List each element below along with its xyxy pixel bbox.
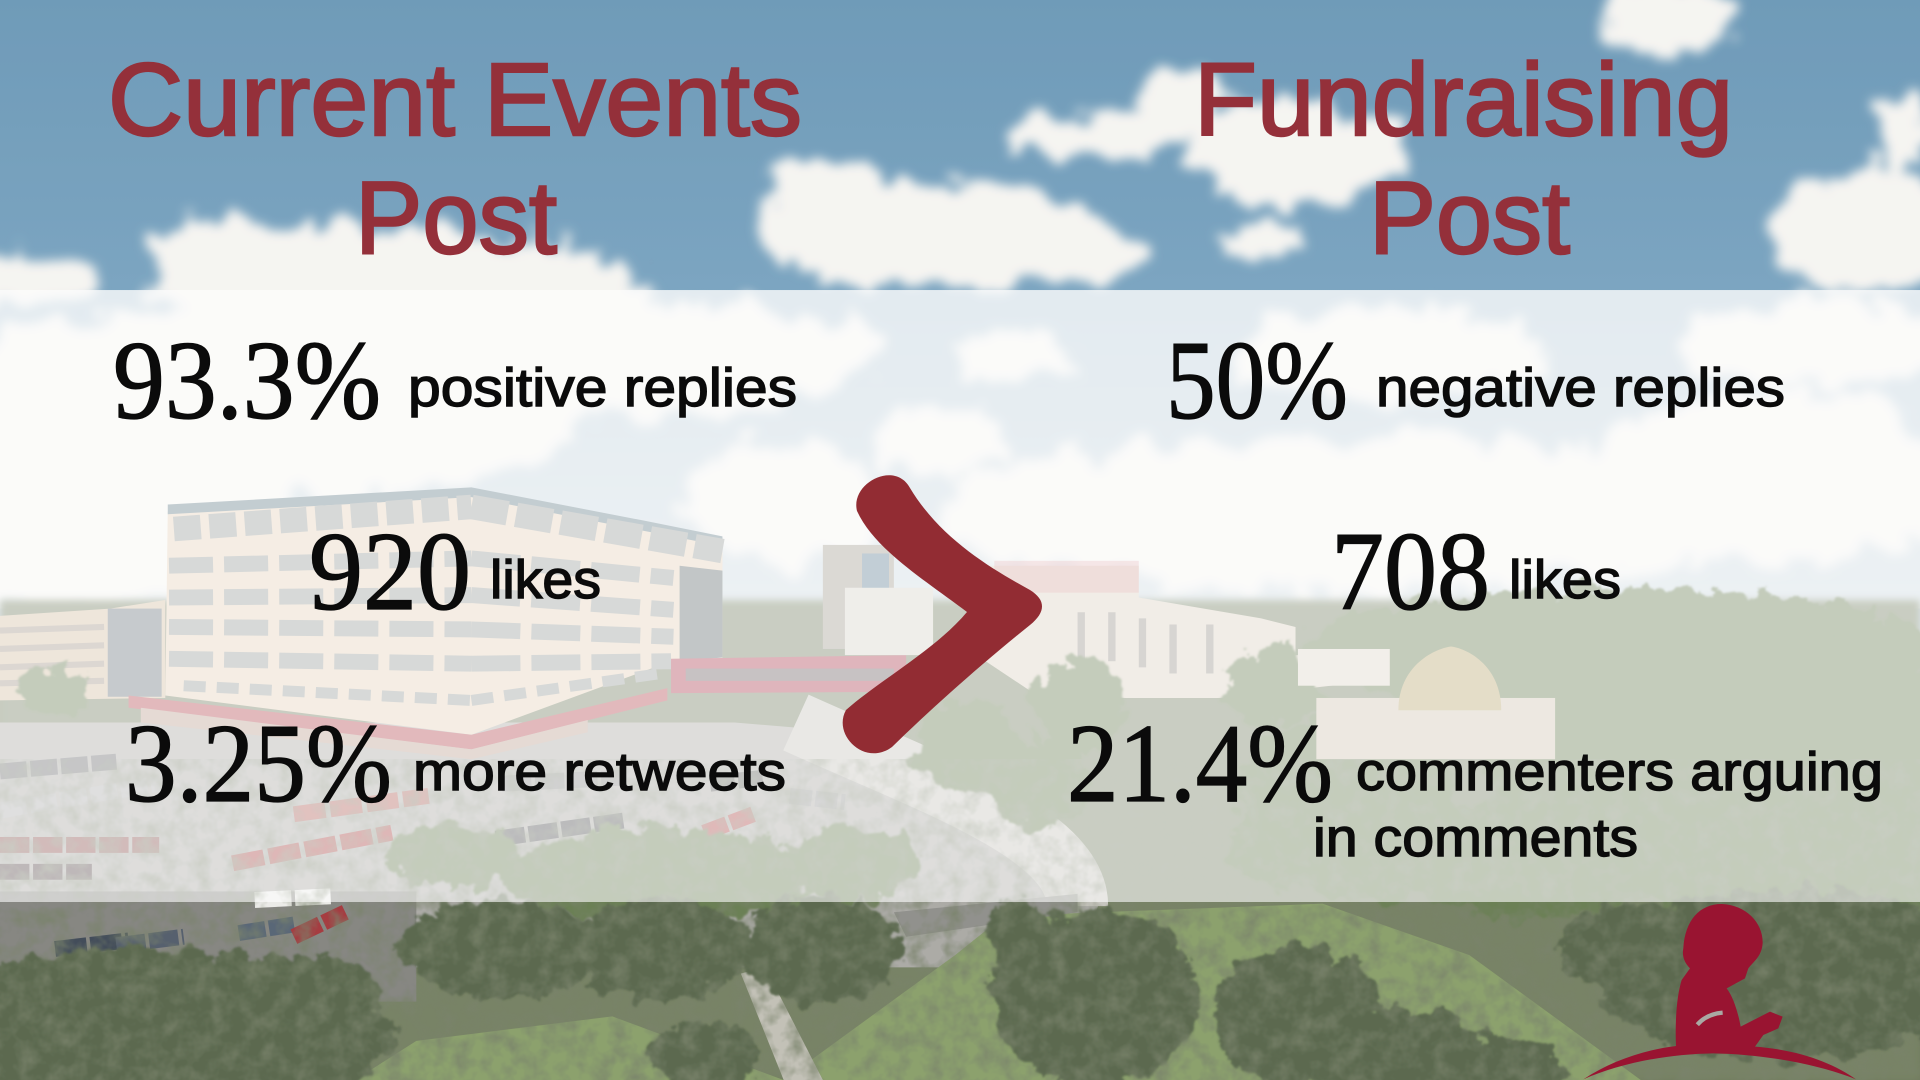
foreground trees <box>0 888 1920 1080</box>
heading: fundraising post: Fundraising <box>1194 42 1733 157</box>
clouds <box>0 0 1920 612</box>
parking lot and road <box>0 722 1102 980</box>
stat: 708 likes: 708 <box>1331 510 1490 634</box>
pale sky wash under band <box>0 290 1920 609</box>
arrow: greater-than chevron <box>843 475 1042 753</box>
stat: 93.3% positive replies: positive replies <box>408 358 797 418</box>
stat: 3.25% more retweets: 3.25% <box>125 702 392 826</box>
tree masses <box>18 588 1920 967</box>
red canopy and bridge <box>129 688 667 749</box>
stat: 708 likes <box>1331 510 1621 634</box>
main building <box>165 490 722 735</box>
stat: 920 likes: 920 <box>309 510 471 634</box>
heading: current events post <box>108 42 802 275</box>
icon: St. Jude child logo <box>1583 904 1856 1079</box>
stat: 50% negative replies <box>1166 319 1785 443</box>
dome building <box>1298 649 1390 686</box>
stat: 3.25% more retweets: more retweets <box>413 742 786 802</box>
left garage <box>0 600 165 700</box>
parked cars <box>0 762 845 949</box>
heading: fundraising post: Post <box>1369 160 1570 275</box>
stat: 21.4% commenters arguing in comments <box>1067 702 1883 868</box>
stat: 93.3% positive replies: 93.3% <box>113 319 381 443</box>
center tower <box>823 545 894 649</box>
stat: 21.4% commenters arguing in comments: 21.4% <box>1067 702 1333 826</box>
right complex <box>986 566 1384 698</box>
panel: translucent white band <box>0 290 1920 902</box>
heading: current events post: Post <box>355 160 557 275</box>
stat: 3.25% more retweets <box>125 702 786 826</box>
stat: 93.3% positive replies <box>113 319 797 443</box>
stat: 708 likes: likes <box>1509 550 1621 610</box>
stat: 21.4% commenters arguing in comments: in comments <box>1313 808 1638 868</box>
stat: 21.4% commenters arguing in comments: commenters arguing <box>1356 742 1883 802</box>
stat: 920 likes: likes <box>490 550 601 610</box>
stat: 50% negative replies: 50% <box>1166 319 1348 443</box>
stat: 920 likes <box>309 510 601 634</box>
heading: current events post: Current Events <box>108 42 802 157</box>
heading: fundraising post <box>1194 42 1733 275</box>
stat: 50% negative replies: negative replies <box>1376 358 1785 418</box>
lawn bottom <box>784 904 1641 1080</box>
